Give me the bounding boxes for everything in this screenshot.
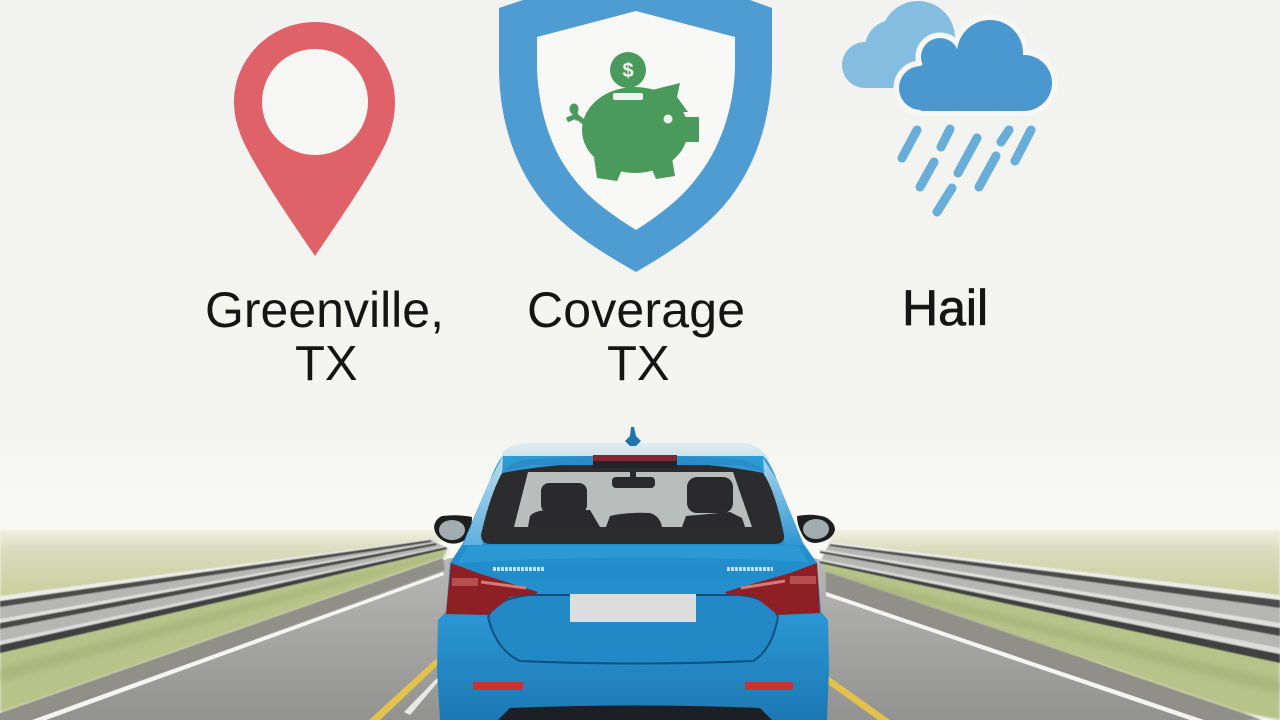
label: Coverage TX: Coverage	[527, 282, 745, 338]
piggy bank	[567, 52, 699, 181]
right pillar	[763, 458, 803, 545]
tail light right	[725, 563, 820, 615]
car body	[437, 456, 829, 720]
car rear view	[434, 427, 835, 720]
road surface	[0, 558, 1250, 720]
seats	[528, 470, 745, 527]
coin	[610, 52, 646, 88]
shield	[499, 0, 772, 272]
label: Hail: Hail	[902, 280, 988, 336]
near grass right	[822, 562, 1280, 720]
road edge line left	[32, 572, 444, 720]
dark cloud	[899, 20, 1052, 111]
label: Coverage TX	[527, 282, 745, 391]
brake light	[593, 455, 677, 468]
side mirror left	[434, 515, 472, 544]
licence plate	[570, 594, 696, 622]
centre line yellow left	[369, 658, 438, 720]
reflector right	[745, 682, 793, 690]
label: Greenville, TX: Greenville,	[205, 282, 444, 338]
cloud halo	[899, 20, 1052, 111]
tail light left	[446, 563, 538, 615]
trunk shut line	[488, 595, 778, 664]
rear window	[481, 462, 784, 544]
far grass right	[830, 530, 1280, 598]
guardrail right	[820, 542, 1280, 663]
shield icon with piggy bank: $	[622, 60, 634, 82]
label: Coverage TX: TX	[607, 337, 670, 391]
rain cloud icon	[842, 1, 1052, 212]
side mirror right	[797, 515, 835, 543]
roof	[495, 443, 772, 476]
far grass left	[0, 530, 450, 598]
trunk lid highlight	[458, 546, 808, 563]
label: Greenville, TX: TX	[295, 337, 358, 391]
light cloud	[842, 1, 955, 88]
near grass left	[0, 548, 448, 720]
spoiler	[503, 456, 765, 472]
left pillar	[463, 456, 503, 545]
location pin icon	[234, 22, 395, 256]
lower bumper grille	[498, 706, 772, 720]
highway landscape	[0, 530, 1280, 720]
reflector left	[473, 682, 523, 690]
road edge line right	[826, 592, 1204, 720]
antenna	[625, 427, 641, 446]
model badge right	[727, 567, 773, 571]
guardrail left	[0, 539, 447, 653]
rain drops	[902, 129, 1031, 212]
centre dash white	[404, 678, 438, 715]
label: Greenville, TX	[205, 282, 444, 391]
model badge left	[493, 567, 544, 571]
trunk recess	[488, 595, 778, 664]
shield icon with piggy bank	[499, 0, 772, 272]
window glass	[514, 472, 752, 527]
centre line yellow right	[828, 676, 890, 720]
